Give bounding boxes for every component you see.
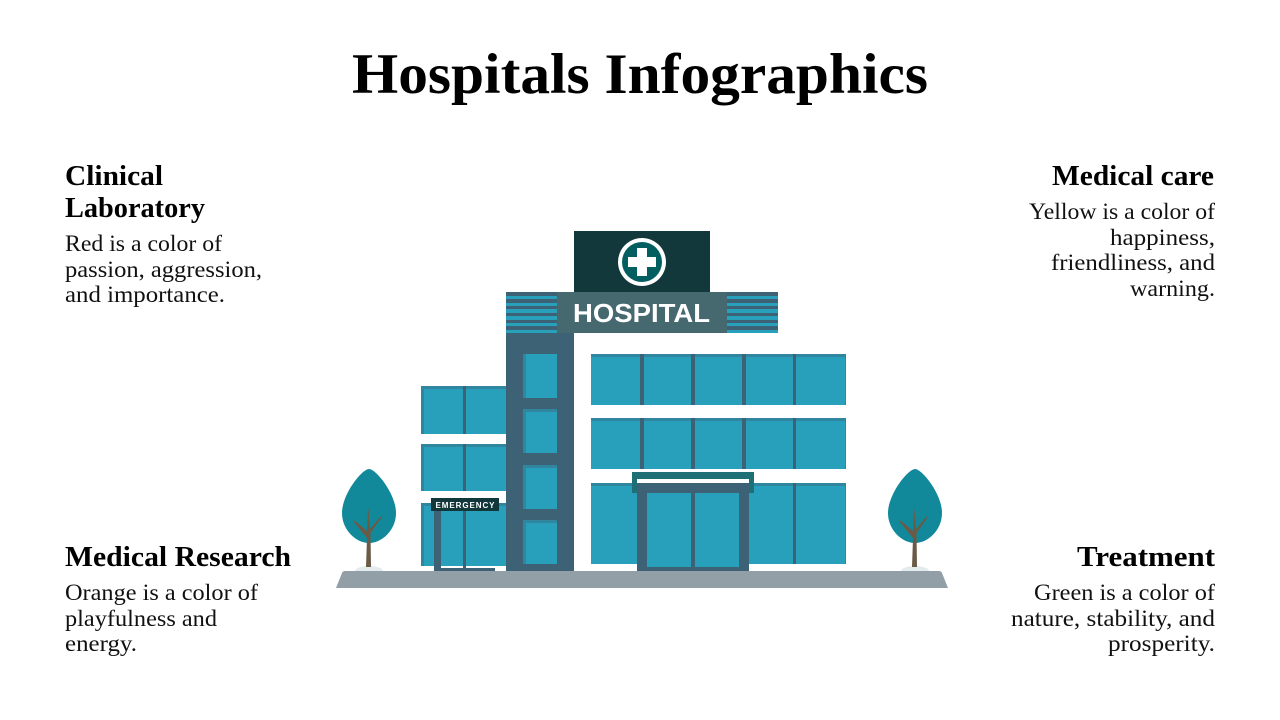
text block: Clinical Laboratory — [65, 161, 262, 308]
icon: right tree — [888, 469, 942, 576]
hospital sign: HOSPITAL — [573, 300, 710, 328]
text block: Clinical Laboratory: and importance. — [65, 282, 225, 308]
text block: Treatment: Green is a color of — [1034, 580, 1215, 606]
ground — [336, 571, 948, 588]
text block: Medical care: happiness, — [1110, 225, 1215, 251]
title: Hospitals Infographics — [352, 43, 928, 106]
tower — [506, 333, 574, 571]
emergency sign: EMERGENCY — [436, 501, 495, 510]
sign band with stripes — [506, 292, 778, 333]
text block: Treatment — [1011, 542, 1216, 657]
text block: Medical Research: Orange is a color of — [65, 580, 258, 606]
text block: Treatment: prosperity. — [1108, 631, 1215, 657]
emergency sign — [431, 498, 499, 511]
text block: Treatment: nature, stability, and — [1011, 606, 1215, 632]
text block: Clinical Laboratory: passion, aggression, — [65, 257, 262, 283]
text block: Medical care: warning. — [1130, 276, 1215, 302]
main entrance door — [632, 472, 754, 571]
text block: Clinical Laboratory: Red is a color of — [65, 231, 222, 257]
text block: Treatment: Treatment — [1077, 542, 1216, 573]
text block: Medical care: Medical care — [1052, 161, 1214, 192]
icon: medical cross sign — [574, 231, 710, 292]
hospital sign — [557, 292, 727, 333]
text block: Medical Research: Medical Research — [65, 542, 291, 573]
icon: left tree — [342, 469, 396, 576]
text block: Medical care: Yellow is a color of — [1029, 199, 1215, 225]
text block: Clinical Laboratory: Clinical — [65, 161, 163, 192]
left wing windows — [421, 386, 506, 568]
text block: Clinical Laboratory: Laboratory — [65, 193, 205, 224]
text block: Medical Research: energy. — [65, 631, 137, 657]
text block: Medical care: friendliness, and — [1051, 250, 1215, 276]
hospital building illustration — [336, 231, 948, 588]
emergency door frame — [434, 505, 495, 571]
text block: Medical care — [1029, 161, 1215, 302]
text block: Medical Research — [65, 542, 291, 657]
main wing windows — [591, 354, 846, 564]
text block: Medical Research: playfulness and — [65, 606, 217, 632]
